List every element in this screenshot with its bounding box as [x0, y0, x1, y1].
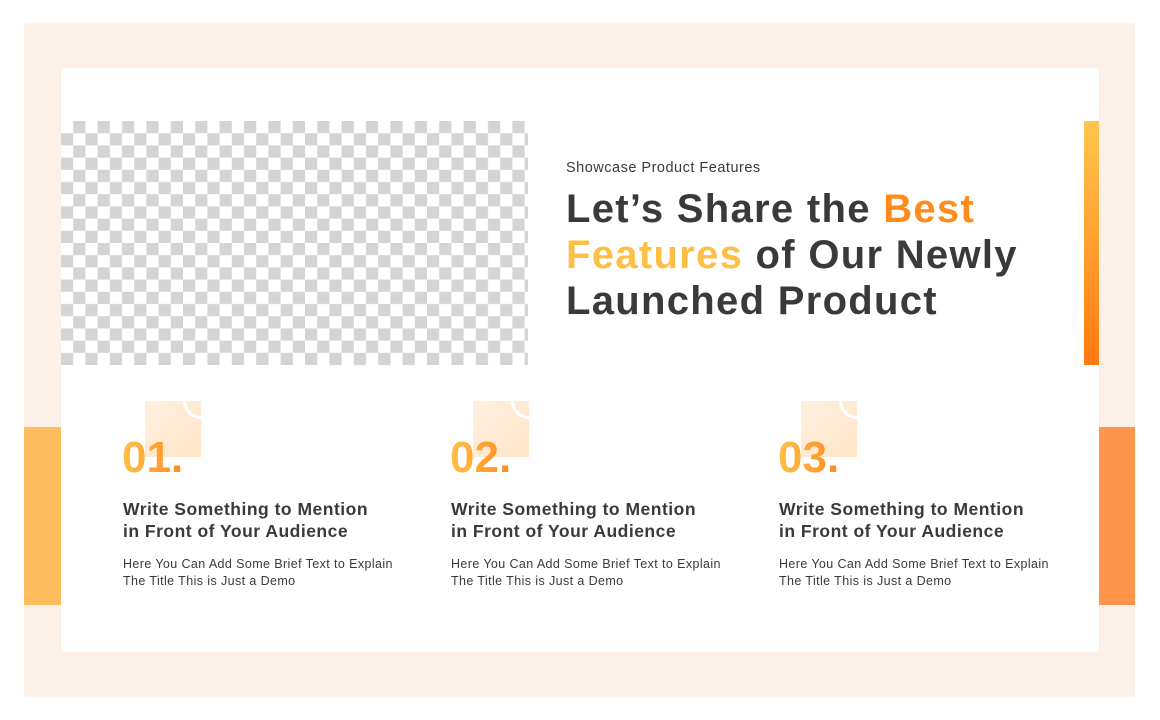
vertical gradient bar: [1084, 121, 1099, 365]
heading 3: [779, 499, 1024, 541]
number 03: 03.: [778, 433, 839, 482]
heading 3: Write Something to Mention: [779, 499, 1024, 519]
subtitle: Showcase Product Features: [566, 160, 761, 176]
text 3: [779, 557, 1049, 588]
feature 2: [450, 401, 721, 588]
heading 1: Write Something to Mention: [123, 499, 368, 519]
title: [566, 187, 1018, 323]
title: Features of Our Newly: [566, 233, 1018, 277]
heading 3: in Front of Your Audience: [779, 521, 1004, 541]
text 1: Here You Can Add Some Brief Text to Explain: [123, 557, 393, 571]
feature 3: [778, 401, 1049, 588]
text 1: [123, 557, 393, 588]
right accent bar: [1099, 427, 1135, 605]
text 3: Here You Can Add Some Brief Text to Explain: [779, 557, 1049, 571]
white content panel: [61, 68, 1099, 652]
feature 1: [122, 401, 393, 588]
icon: number badge 2: [473, 401, 529, 457]
heading 2: Write Something to Mention: [451, 499, 696, 519]
left accent bar: [24, 427, 61, 605]
icon: number badge 3: [801, 401, 857, 457]
heading 2: in Front of Your Audience: [451, 521, 676, 541]
heading 1: [123, 499, 368, 541]
text 2: Here You Can Add Some Brief Text to Explain: [451, 557, 721, 571]
number 02: 02.: [450, 433, 511, 482]
icon: number badge 1: [145, 401, 201, 457]
title: Let’s Share the Best: [566, 187, 975, 231]
title: Launched Product: [566, 279, 938, 323]
text 2: The Title This is Just a Demo: [451, 574, 624, 588]
heading 1: in Front of Your Audience: [123, 521, 348, 541]
text 2: [451, 557, 721, 588]
number 01: 01.: [122, 433, 183, 482]
heading 2: [451, 499, 696, 541]
text 1: The Title This is Just a Demo: [123, 574, 296, 588]
image placeholder: [61, 121, 528, 365]
text 3: The Title This is Just a Demo: [779, 574, 952, 588]
